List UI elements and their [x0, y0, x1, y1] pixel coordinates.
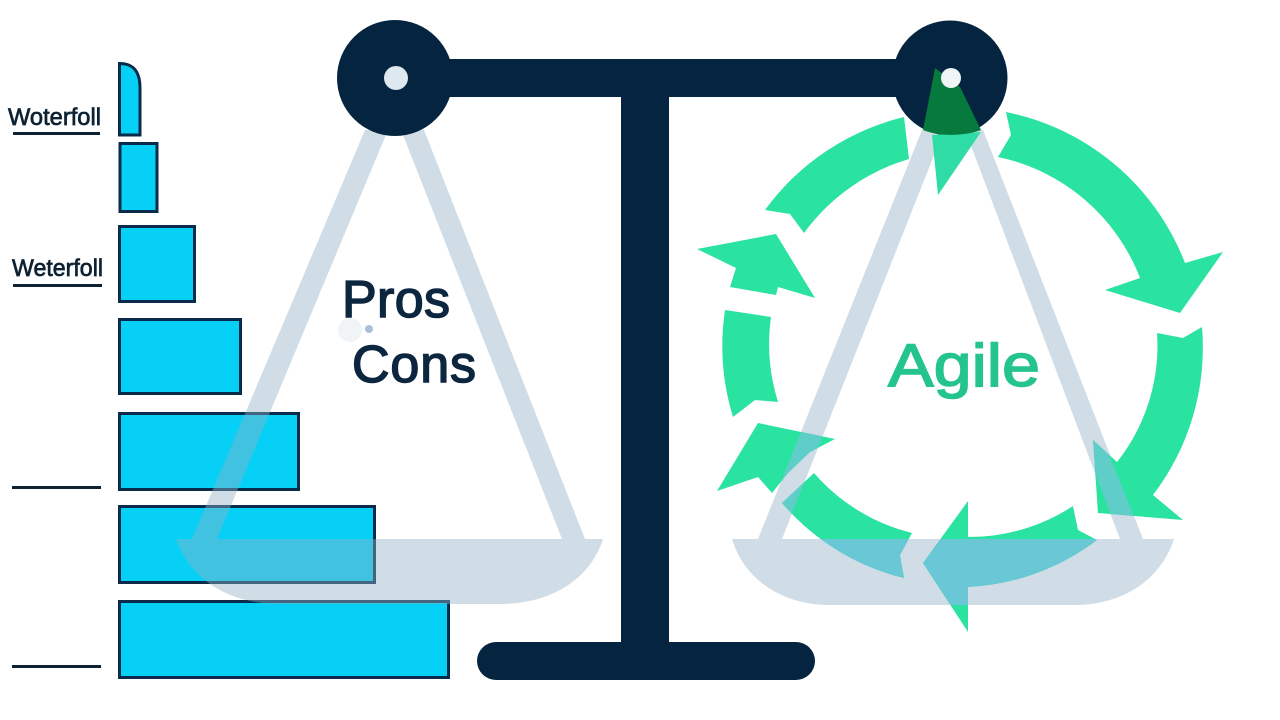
waterfall staircase bars — [120, 64, 448, 678]
right pivot — [892, 20, 1008, 136]
left pivot — [337, 20, 453, 136]
text: Cons: Cons — [352, 336, 476, 394]
base — [477, 642, 815, 680]
balance scale frame — [337, 20, 1008, 680]
bar 5 — [120, 414, 298, 490]
post — [621, 78, 669, 663]
bar 4 — [120, 320, 240, 394]
bar 1 — [120, 64, 140, 135]
right scale pan and straps — [732, 130, 1174, 605]
beam — [395, 59, 950, 97]
label: Weterfoll: Weterfoll — [12, 255, 103, 282]
left scale pan and straps — [176, 130, 603, 604]
bar 6 — [120, 506, 374, 582]
arrow overlap with right pan — [820, 539, 1097, 605]
top arrow tip below pivot — [932, 132, 981, 195]
smudge mark — [338, 318, 373, 342]
label line: bottom — [12, 665, 101, 668]
bar 7 — [120, 602, 448, 678]
right pivot hole — [941, 68, 961, 88]
text: Agile: Agile — [888, 332, 1040, 399]
label: Woterfoll: Woterfoll — [8, 104, 101, 131]
text: Pros: Pros — [342, 271, 450, 329]
left pivot hole — [384, 66, 408, 90]
arrow overlap with right straps — [781, 432, 1134, 516]
bar 3 — [120, 226, 194, 302]
label line: lower — [12, 486, 101, 489]
bar 2 — [120, 144, 157, 212]
dark green wedge over right pivot — [923, 68, 981, 135]
agile cycle arrows — [697, 112, 1223, 632]
